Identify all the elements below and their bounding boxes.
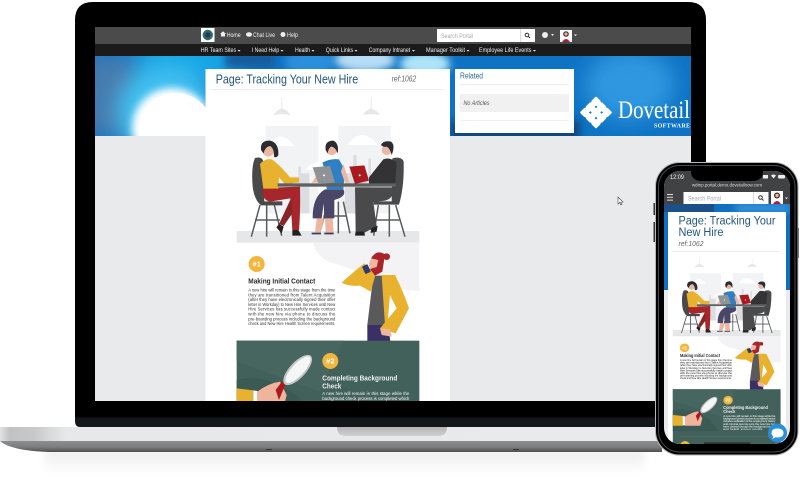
phone page title: Page: Tracking Your	[678, 216, 776, 228]
red laptop	[349, 165, 369, 184]
laptop base	[0, 427, 662, 452]
secondary navigation bar: Company Intranet	[369, 47, 410, 54]
mouse cursor	[618, 197, 623, 205]
secondary navigation bar: Manager Toolkit	[426, 47, 465, 54]
phone section 2 body	[723, 414, 776, 431]
secondary navigation bar: Employee Life Events	[479, 47, 532, 54]
section 2 body text: A new hire will remain in this stage while the	[322, 391, 410, 396]
section 1 body text	[248, 288, 336, 326]
phone section 1 body: letter in Workday) to New Hire Services until New	[680, 366, 733, 370]
hamburger menu	[667, 194, 673, 201]
secondary navigation bar: HR Team Sites	[201, 47, 236, 54]
top navigation bar	[95, 27, 691, 44]
blue banner	[95, 56, 691, 136]
help link	[280, 32, 298, 39]
phone screen	[664, 170, 790, 479]
home link	[220, 31, 240, 37]
laptop screen	[95, 27, 691, 401]
URL text: wdmp.portal.demo.dovetailnow.com	[692, 182, 762, 188]
section 1 body text: pre-boarding process including the background	[248, 316, 336, 321]
infographic artwork	[237, 97, 419, 491]
illustration: team meeting	[237, 97, 419, 243]
phone page title: New Hire	[678, 227, 724, 239]
chat link: Chat Live	[253, 32, 275, 39]
background blob	[313, 242, 419, 291]
search box: Search Portal	[441, 34, 473, 40]
phone	[654, 162, 799, 479]
phone section 1 body: with the new hire via phone to discuss the	[680, 371, 732, 375]
woman in yellow	[260, 141, 302, 236]
reference number: ref:1062	[392, 74, 417, 84]
help link: Help	[287, 32, 298, 39]
portal logo	[201, 28, 214, 42]
man in black	[355, 141, 397, 236]
phone section 1 heading: Making Initial Contact	[680, 353, 721, 358]
phone section 2 body: and criminal records once the new hire has	[723, 422, 776, 426]
Dovetail logo mark	[580, 96, 612, 129]
user avatar	[560, 30, 577, 42]
section 2 heading: Check	[322, 384, 341, 390]
secondary navigation bar	[95, 44, 691, 56]
section 1 body text: (after they have electronically signed their offer	[248, 297, 336, 302]
man on phone	[342, 252, 409, 342]
page background	[95, 136, 691, 401]
related panel	[455, 69, 574, 133]
phone section 1 body: check and New Hire Health Screen requirements.	[680, 376, 732, 380]
home indicator	[704, 442, 750, 444]
left chair	[251, 157, 282, 237]
woman in blue	[312, 141, 349, 234]
Dovetail wordmark: Dovetail	[618, 97, 690, 124]
phone section 2 body: includes verification of the employment history	[723, 419, 776, 423]
related heading: Related	[460, 72, 483, 80]
section 2 heading: Completing Background	[322, 376, 397, 382]
secondary navigation bar: Health	[295, 47, 310, 54]
section 1 heading: Making Initial Contact	[248, 278, 316, 286]
section 1 body text: with the new hire via phone to discuss the	[248, 312, 336, 316]
secondary navigation bar: I Need Help	[252, 47, 280, 54]
phone section 1 body: pre-boarding process including the background	[680, 374, 732, 378]
main content panel	[206, 69, 450, 401]
gray laptop	[313, 166, 335, 184]
next section badge	[680, 441, 690, 451]
laptop base shadow	[45, 450, 645, 474]
phone section 1 body: A new hire will remain in this stage from the time	[680, 358, 732, 362]
office backdrop	[266, 97, 391, 213]
page title: Page: Tracking Your New Hire	[216, 72, 358, 86]
phone artwork	[673, 258, 781, 479]
phone section 1 body: Hire Services has successfully made contact	[680, 368, 732, 372]
phone banner	[664, 204, 790, 290]
no articles box: No Articles	[464, 100, 490, 107]
section 1 body text: Hire Services has successfully made contact	[248, 307, 336, 312]
home link: Home	[227, 32, 241, 39]
phone section 1 body	[680, 358, 733, 380]
compass menu	[542, 32, 554, 38]
laptop lid bezel	[75, 2, 706, 427]
phone section 2 body: been cleared through the background check	[723, 424, 776, 428]
floor	[237, 231, 419, 243]
section 2 body text: background check process is completed which	[322, 396, 410, 401]
magnifying glass and hand	[237, 350, 317, 408]
phone section 1 body: they are transitioned from Talent Acquisition	[680, 361, 732, 365]
section 1 body text: check and New Hire Health Screen requirements.	[248, 321, 335, 326]
phone status bar	[664, 170, 790, 204]
clock: 12:09	[670, 175, 685, 181]
section 2 panel	[237, 341, 419, 491]
phone section 2 heading	[723, 405, 768, 414]
phone content panel	[668, 212, 786, 479]
number badge 2: #2	[326, 357, 335, 366]
right chair	[374, 158, 405, 237]
section 2 body text	[322, 391, 410, 401]
section 1 body text: they are transitioned from Talent Acquisition	[248, 292, 336, 297]
section 1 body text: letter in Workday) to New Hire Services until New	[248, 302, 336, 307]
status icons	[763, 174, 785, 178]
phone body	[654, 162, 799, 455]
phone section 2 body: A new hire will remain in this stage while the	[723, 414, 776, 418]
stool	[320, 202, 350, 233]
software label: SOFTWARE	[654, 124, 690, 130]
phone section 2 body: background check process is completed which	[723, 417, 776, 421]
phone section 2 heading: Check	[723, 409, 736, 414]
phone avatar	[771, 191, 788, 204]
section 1	[237, 242, 419, 491]
number badge 2	[322, 353, 338, 369]
chat bubble	[768, 424, 787, 442]
phone section 2 body: and health screen results.	[723, 427, 763, 431]
phone section 2 heading: Completing Background	[723, 405, 768, 410]
phone search box: Search Portal	[688, 196, 721, 202]
section 2 heading	[322, 376, 397, 390]
number badge 1	[249, 256, 265, 272]
phone section 1 body: (after they have electronically signed their offer	[680, 363, 732, 367]
phone reference number: ref:1062	[678, 239, 704, 248]
table	[278, 183, 396, 187]
search box	[437, 29, 535, 42]
phone page title	[678, 216, 776, 239]
number badge 1: #1	[252, 260, 262, 269]
secondary navigation bar: Quick Links	[326, 47, 353, 54]
section 1 body text: A new hire will remain in this stage from the time	[248, 288, 336, 292]
chat link	[246, 32, 275, 37]
notch	[691, 170, 763, 181]
